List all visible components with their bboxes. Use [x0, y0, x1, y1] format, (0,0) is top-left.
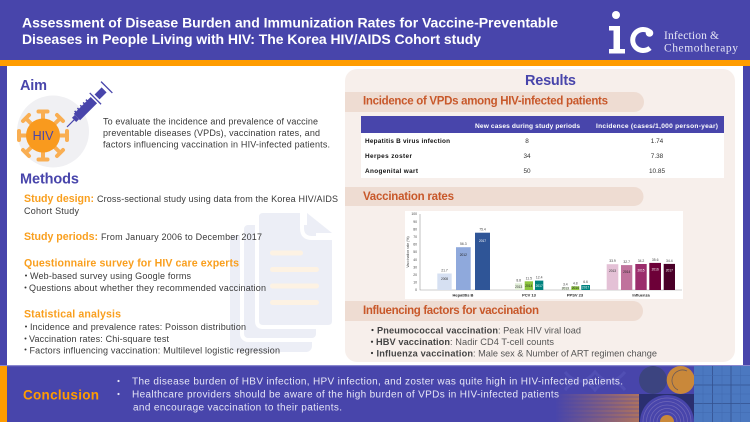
study design: Cross-sectional study using data from the Korea HIV/AIDS: [97, 194, 338, 204]
header band: [0, 0, 750, 66]
panel: results: [345, 69, 735, 362]
section heading: vaccination rates: [345, 187, 644, 206]
icon: HIV virus and syringe: HIV: [33, 129, 54, 143]
study design: Cohort Study: [24, 206, 80, 216]
bar chart: vaccination rates: 2013: [515, 285, 522, 289]
bar chart: vaccination rates: Influenza: [632, 292, 650, 298]
questionnaire survey: Web-based survey using Google forms: [30, 271, 192, 281]
questionnaire survey: Questionnaire survey for HIV care experts: [24, 258, 239, 270]
aim text: factors influencing vaccination in HIV-infected patients.: [103, 140, 330, 150]
bar chart: vaccination rates: 33.9: [609, 259, 616, 263]
watermark: document icon: [230, 211, 334, 352]
bar chart: vaccination rates: 34.2: [638, 259, 644, 263]
bar chart: vaccination rates: 2013: [609, 269, 616, 273]
bar chart: vaccination rates: 2014: [572, 286, 579, 290]
aim text: preventable diseases (VPDs), vaccination rates, and: [103, 128, 320, 138]
questionnaire survey: [24, 258, 266, 293]
journal logo: [609, 11, 738, 54]
incidence table: 34: [523, 153, 531, 160]
bar chart: vaccination rates: 50: [413, 250, 417, 254]
bar chart: vaccination rates: 10: [413, 281, 417, 285]
bar chart: vaccination rates: 20: [413, 273, 417, 277]
incidence table: Herpes zoster: [365, 153, 412, 160]
section heading: incidence: Incidence of VPDs among HIV-infected patients: [363, 96, 608, 108]
bar chart: vaccination rates: 2017: [666, 268, 673, 272]
bar chart: vaccination rates: 2015: [637, 268, 645, 272]
bar chart: vaccination rates: 2017: [536, 284, 543, 288]
bar chart: vaccination rates: 2012: [460, 253, 467, 257]
section heading: incidence: [345, 92, 644, 112]
statistical analysis: Incidence and prevalence rates: Poisson distribution: [30, 322, 246, 332]
influencing factors list: : Peak HIV viral load: [498, 326, 581, 336]
conclusion text: [117, 376, 623, 414]
bar chart: vaccination rates: 34.4: [666, 259, 673, 263]
bar chart: vaccination rates: 70: [413, 235, 417, 239]
bar chart: vaccination rates: 90: [413, 220, 417, 224]
bar chart: vaccination rates: PCV 13: [522, 292, 537, 298]
bar chart: vaccination rates: 4.8: [573, 281, 578, 285]
bar chart: vaccination rates: Vaccination rate (%): [406, 236, 410, 268]
statistical analysis: Statistical analysis: [24, 308, 121, 320]
incidence table: Anogenital wart: [365, 168, 419, 175]
heading: results: Results: [525, 73, 576, 89]
bar chart: vaccination rates: 30: [413, 265, 417, 269]
bar chart: vaccination rates: 12.4: [536, 276, 543, 280]
bar chart: vaccination rates: 56.3: [460, 242, 467, 246]
bar chart: vaccination rates: 60: [413, 243, 417, 247]
bar chart: vaccination rates: 0: [415, 288, 417, 292]
study design: [24, 193, 338, 216]
icon: HIV virus and syringe: [17, 81, 113, 168]
bar chart: vaccination rates: 21.7: [441, 268, 448, 272]
bar chart: vaccination rates: 32.7: [623, 260, 630, 264]
bar chart: vaccination rates: 80: [413, 227, 417, 231]
incidence table: Incidence (cases/1,000 person-year): [596, 123, 718, 130]
bar chart: vaccination rates: 100: [411, 212, 417, 216]
incidence table: 50: [523, 168, 531, 175]
bar chart: vaccination rates: PPSV 23: [567, 292, 584, 298]
influencing factors list: Influenza vaccination: [376, 348, 473, 358]
incidence table: 7.38: [651, 153, 664, 160]
bar chart: vaccination rates: 2013: [562, 286, 569, 290]
influencing factors list: Pneumococcal vaccination: [377, 326, 498, 336]
title: [22, 14, 558, 47]
section heading: influencing factors: Influencing factors for vaccination: [363, 305, 539, 317]
journal logo: Infection &: [664, 30, 719, 42]
bar chart: vaccination rates: 11.5: [526, 276, 532, 280]
statistical analysis: Factors influencing vaccination: Multilevel logistic regression: [30, 345, 280, 355]
bar chart: vaccination rates: 2016: [652, 268, 659, 272]
incidence table: 10.85: [649, 168, 665, 175]
questionnaire survey: Questions about whether they recommended vaccination: [29, 283, 266, 293]
incidence table: 8: [525, 138, 529, 145]
aim text: [103, 116, 330, 150]
influencing factors list: : Nadir CD4 T-cell counts: [450, 337, 554, 347]
bar chart: vaccination rates: 2017: [479, 239, 486, 243]
title: Assessment of Disease Burden and Immunization Rates for Vaccine-Preventable: [22, 14, 558, 30]
decoration: geometric pattern: [555, 366, 750, 422]
bar chart: vaccination rates: 2014: [623, 270, 630, 274]
bar chart: vaccination rates: 40: [413, 258, 417, 262]
bar chart: vaccination rates: 2014: [525, 284, 533, 288]
bar chart: vaccination rates: 35.6: [652, 258, 659, 262]
incidence table: 1.74: [651, 138, 664, 145]
conclusion text: The disease burden of HBV infection, HPV infection, and zoster was quite high in HIV-infected patients.: [132, 376, 623, 388]
statistical analysis: Vaccination rates: Chi-square test: [29, 334, 169, 344]
bar chart: vaccination rates: [405, 211, 683, 299]
conclusion text: and encourage vaccination to their patients.: [133, 402, 342, 414]
statistical analysis: [24, 308, 280, 355]
incidence table: New cases during study periods: [475, 123, 580, 130]
heading: Aim: Aim: [20, 78, 47, 94]
bar chart: vaccination rates: 2008: [441, 277, 448, 281]
conclusion text: Healthcare providers should be aware of the high burden of VPDs in HIV-infected patients: [132, 390, 559, 400]
study design: Study design:: [24, 193, 94, 205]
bar chart: vaccination rates: 8.8: [516, 278, 521, 282]
bar chart: vaccination rates: 2017: [582, 286, 589, 290]
heading: conclusion: Conclusion: [23, 388, 99, 402]
study periods: Study periods:: [24, 231, 98, 243]
study periods: [24, 231, 262, 243]
bar chart: vaccination rates: 75.4: [479, 228, 486, 232]
bar chart: vaccination rates: 6.6: [583, 280, 588, 284]
section heading: influencing factors: [345, 301, 643, 321]
influencing factors list: : Male sex & Number of ART regimen change: [473, 348, 657, 358]
title: Diseases in People Living with HIV: The Korea HIV/AIDS Cohort study: [22, 31, 481, 47]
study periods: From January 2006 to December 2017: [101, 232, 262, 242]
influencing factors list: HBV vaccination: [376, 337, 450, 347]
incidence table: Hepatitis B virus infection: [365, 138, 450, 145]
aim text: To evaluate the incidence and prevalence of vaccine: [103, 116, 318, 126]
side bars: [0, 66, 750, 366]
bar chart: vaccination rates: 3.4: [563, 282, 568, 286]
conclusion band: [0, 365, 750, 422]
heading: Methods: Methods: [20, 172, 79, 188]
bar chart: vaccination rates: Hepatitis B: [453, 292, 474, 298]
influencing factors list: [371, 326, 657, 358]
incidence table: [361, 116, 724, 178]
section heading: vaccination rates: Vaccination rates: [363, 191, 454, 203]
journal logo: Chemotherapy: [664, 42, 738, 54]
